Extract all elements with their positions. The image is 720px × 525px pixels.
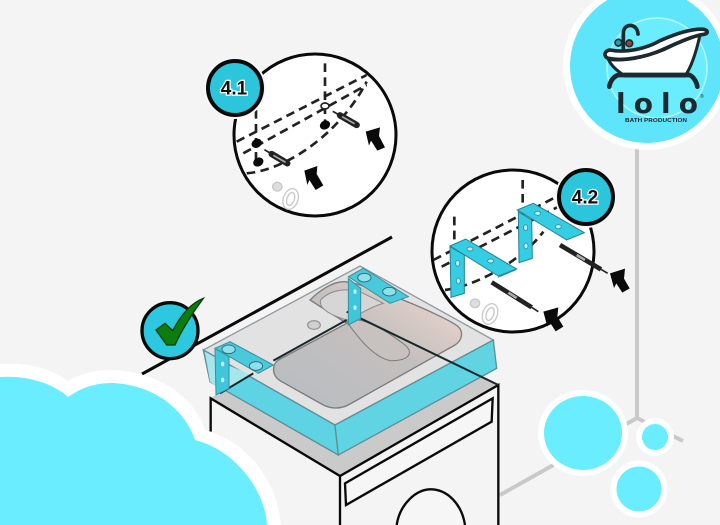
- faint screw and washer: [470, 299, 501, 327]
- logo registered mark: ®: [700, 93, 704, 100]
- badge 4.2: 4.2: [572, 188, 598, 208]
- logo inner circle: [607, 18, 707, 118]
- sink front right face: [335, 340, 497, 455]
- faucet handles: [615, 39, 622, 46]
- bracket right: [517, 203, 584, 263]
- faint screw and washer: [273, 182, 301, 212]
- right bracket: [348, 268, 408, 325]
- bolts: [492, 245, 608, 312]
- machine control panel: [345, 398, 493, 505]
- logo: [563, 0, 720, 150]
- cloud bottom left: [0, 364, 281, 525]
- washing machine: [210, 320, 498, 525]
- detail circle 4.1: [234, 54, 396, 216]
- cloud white outline: [0, 364, 281, 525]
- wall corner lines: [500, 140, 683, 495]
- light upper left side panel: [205, 352, 252, 392]
- ring mark: [321, 103, 329, 109]
- badge 4.2: [555, 166, 617, 228]
- machine door: [397, 489, 465, 525]
- badge 4.1: [204, 57, 266, 119]
- tub rim: [605, 29, 707, 59]
- arrow right: [366, 127, 385, 151]
- badge circle: [142, 303, 198, 359]
- logo wordmark: lolo: [616, 87, 698, 120]
- dashed guide lines: [237, 63, 367, 173]
- medium bubble: [616, 466, 662, 512]
- large bubble: [544, 396, 622, 470]
- arrow lower: [543, 307, 563, 331]
- faucet: [623, 25, 638, 50]
- small bubble: [642, 424, 668, 450]
- sink front left face: [203, 350, 338, 455]
- machine top: [210, 320, 498, 476]
- tub body: [608, 35, 700, 76]
- drill holes: [250, 119, 332, 168]
- basin back ledge: [320, 290, 383, 320]
- bracket left: [450, 239, 517, 297]
- wall line: [142, 237, 392, 374]
- machine back edges seen through sink: [220, 312, 498, 393]
- logo circle: [570, 0, 720, 143]
- dashed guide lines: [433, 180, 558, 290]
- callout 4.2: [432, 166, 630, 332]
- badge 4.1: 4.1: [221, 78, 248, 100]
- cloud fill: [0, 377, 267, 525]
- arrow lower: [304, 166, 323, 190]
- logo white ring: [563, 0, 720, 150]
- logo tagline: BATH PRODUCTION: [625, 118, 687, 124]
- green check mark: [156, 298, 203, 345]
- basin: [274, 282, 462, 408]
- detail circle 4.2: [432, 170, 594, 332]
- wall anchors: [265, 112, 357, 163]
- basin drain channel: [347, 320, 409, 361]
- bubbles: [544, 396, 668, 512]
- machine outline: [211, 385, 498, 525]
- sink top face: [203, 266, 493, 425]
- sink with brackets: [203, 266, 498, 455]
- callout 4.1: [204, 54, 396, 216]
- left bracket: [215, 342, 273, 395]
- tub feet: [609, 75, 697, 87]
- faucet hole: [308, 321, 320, 329]
- check mark badge: [142, 298, 203, 359]
- arrow right: [610, 269, 630, 293]
